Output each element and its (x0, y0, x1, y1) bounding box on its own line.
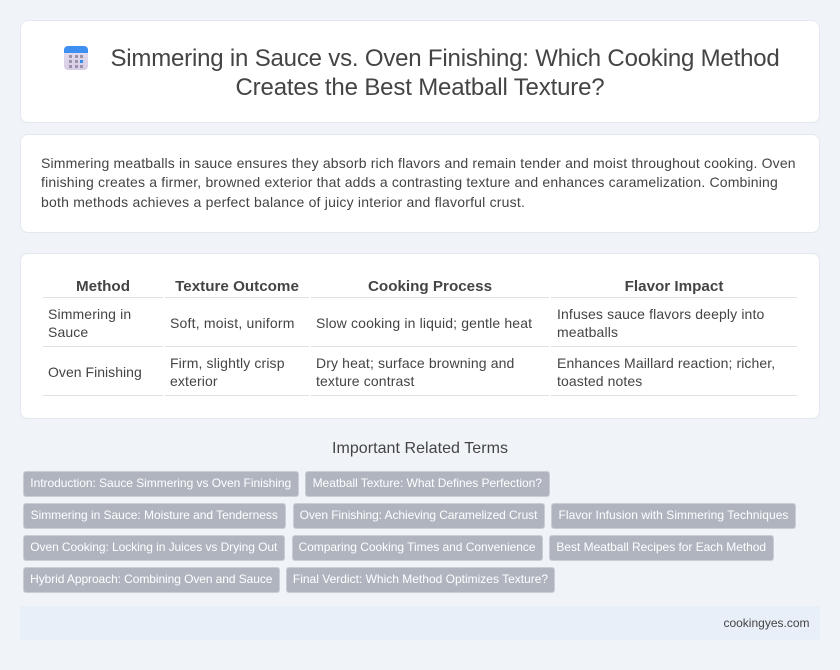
row 1: flavor: meatballs (557, 324, 618, 340)
heading: Important Related Terms: Important Related Terms (332, 440, 508, 456)
chip (23, 503, 286, 529)
row 2: texture: exterior (170, 373, 218, 389)
panel: introduction (20, 134, 820, 233)
row 1: method (48, 306, 131, 340)
row 1: texture: Soft, moist, uniform (170, 315, 295, 331)
row 1: method: Simmering in (48, 306, 131, 322)
chip: Hybrid Approach: Combining Oven and Sauce (30, 572, 272, 586)
panel: comparison table (20, 253, 820, 419)
row 2: process: texture contrast (316, 373, 415, 389)
text block: introduction: both methods achieves a perfect balance of juicy interior and flavorful crust. (41, 194, 525, 210)
row 1: method: Sauce (48, 324, 88, 340)
panel: related term chips (23, 471, 796, 593)
text block: introduction (41, 154, 796, 210)
row 2: flavor: toasted notes (557, 373, 642, 389)
chip: Introduction: Sauce Simmering vs Oven Finishing (30, 476, 291, 490)
chip: Flavor Infusion with Simmering Techniques (559, 508, 788, 522)
chip (23, 535, 284, 561)
table header: Method: Method (76, 278, 130, 295)
row 1: process: Slow cooking in liquid; gentle heat (316, 315, 532, 331)
row 1: flavor (557, 306, 764, 340)
footer (20, 606, 820, 640)
chip: Simmering in Sauce: Moisture and Tenderness (31, 508, 278, 522)
title: Simmering in Sauce vs. Oven Finishing: Which Cooking Method (110, 45, 780, 72)
chip: Oven Cooking: Locking in Juices vs Drying Out (30, 540, 277, 554)
table header: Flavor Impact: Flavor Impact (625, 278, 723, 295)
chip (23, 471, 298, 497)
row 2: texture (170, 355, 285, 389)
footer credit: cookingyes.com (723, 616, 810, 630)
chip (292, 535, 542, 561)
chip (305, 471, 550, 497)
row 2: process: Dry heat; surface browning and (316, 355, 514, 371)
chip (23, 567, 280, 593)
row 1: flavor: Infuses sauce flavors deeply into (557, 306, 764, 322)
title: Creates the Best Meatball Texture? (236, 74, 604, 101)
chip: Final Verdict: Which Method Optimizes Texture? (293, 572, 548, 586)
row 2: texture: Firm, slightly crisp (170, 355, 285, 371)
chip: Meatball Texture: What Defines Perfection? (313, 476, 542, 490)
chip: Oven Finishing: Achieving Caramelized Crust (300, 508, 537, 522)
title (110, 45, 780, 101)
chip (549, 535, 774, 561)
panel: title card (20, 20, 820, 123)
chip (292, 503, 544, 529)
text block: introduction: finishing creates a firmer, browned exterior that adds a contrasting texture and enhances caramelization. Combining (41, 174, 778, 190)
row 2: flavor: Enhances Maillard reaction; richer, (557, 355, 775, 371)
table header: Texture Outcome: Texture Outcome (175, 278, 299, 295)
row 2: flavor (557, 355, 775, 389)
row 2: process (316, 355, 514, 389)
text block: introduction: Simmering meatballs in sauce ensures they absorb rich flavors and remain tender and moist throughout cooking. Oven (41, 154, 796, 170)
chip (286, 567, 555, 593)
row 2: method: Oven Finishing (48, 364, 142, 380)
table header: Cooking Process: Cooking Process (368, 278, 492, 295)
chip: Comparing Cooking Times and Convenience (299, 540, 535, 554)
icon: calendar (64, 46, 88, 70)
chip: Best Meatball Recipes for Each Method (556, 540, 766, 554)
chip (551, 503, 796, 529)
